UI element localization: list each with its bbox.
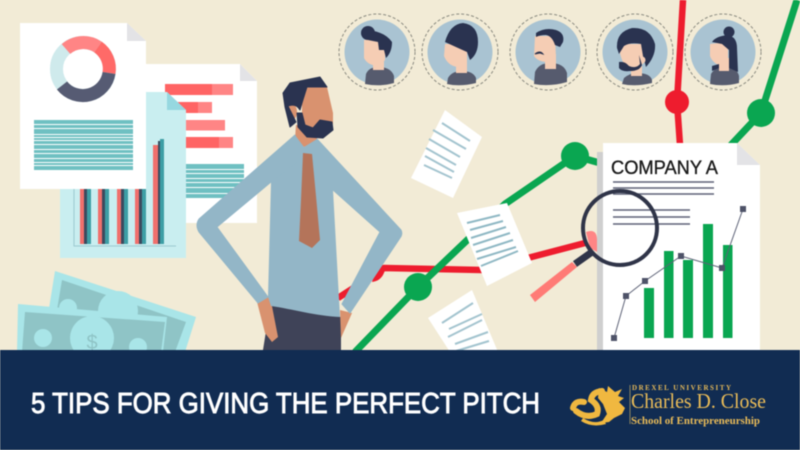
logo: school name: Charles D. Close xyxy=(631,389,766,413)
hair xyxy=(283,77,327,127)
right arm xyxy=(312,139,402,313)
person: man with beard and tie xyxy=(197,77,402,350)
icon: dollar bills xyxy=(17,271,196,360)
face xyxy=(302,87,333,134)
avatar 5 xyxy=(685,14,761,90)
left arm xyxy=(197,135,300,303)
red trend line xyxy=(338,0,689,298)
avatar 2 xyxy=(422,14,498,90)
banner xyxy=(0,350,800,450)
donut chart xyxy=(56,42,110,96)
floating paper 3 xyxy=(428,290,498,352)
avatar 3 xyxy=(510,14,586,90)
logo: school name: School of Entrepreneurship xyxy=(631,415,760,427)
document: Company A report xyxy=(597,143,760,352)
floating paper 1 xyxy=(411,110,482,198)
bar chart xyxy=(644,224,732,338)
green trend line xyxy=(355,0,797,352)
document: vertical bar chart xyxy=(60,92,186,258)
tie xyxy=(299,153,320,248)
logo: Drexel dragon xyxy=(573,386,625,425)
hands xyxy=(256,296,352,342)
neck xyxy=(295,125,317,147)
heading: Company A: COMPANY A xyxy=(611,158,718,179)
logo: school name: DREXEL UNIVERSITY xyxy=(632,384,731,392)
document: horizontal bar report xyxy=(140,64,257,223)
beard xyxy=(297,113,333,138)
torso xyxy=(268,135,340,317)
avatar 1 xyxy=(339,14,415,90)
avatars row xyxy=(339,14,761,90)
floating paper 2 xyxy=(457,203,532,286)
icon: dollar bills: $ xyxy=(86,332,98,354)
trousers xyxy=(263,306,341,350)
avatar 4 xyxy=(597,14,673,90)
logo: school name xyxy=(631,384,766,427)
icon: magnifying glass xyxy=(530,191,657,302)
report text lines xyxy=(613,182,714,224)
title: 5 TIPS FOR GIVING THE PERFECT PITCH xyxy=(31,388,540,420)
line chart xyxy=(611,206,746,341)
ear xyxy=(287,104,297,120)
document: donut chart report xyxy=(20,23,146,189)
